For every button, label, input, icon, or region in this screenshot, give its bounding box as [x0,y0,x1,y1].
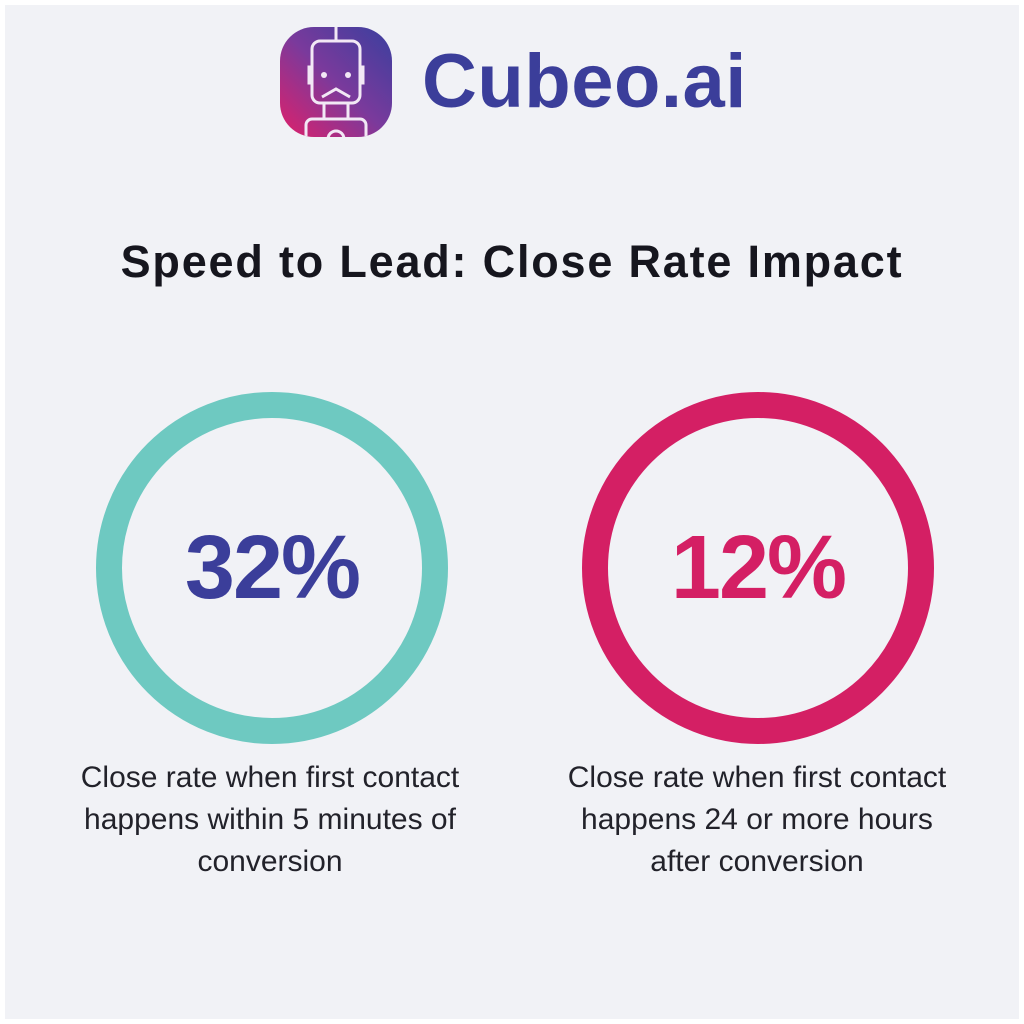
number: 32% [185,518,359,618]
number: 12% [671,518,845,618]
icon: robot [280,27,392,137]
caption: 12% [568,761,946,878]
ring: teal [96,392,448,744]
stat: 32% [96,392,448,744]
stat: 12% [582,392,934,744]
logo [280,27,747,137]
caption: 32%: conversion [197,845,343,878]
caption: 12%: Close rate when first contact [568,761,946,794]
ring: pink [582,392,934,744]
title: Speed to Lead: Close Rate Impact [121,236,903,287]
caption: 12%: happens 24 or more hours [581,803,933,836]
caption: 32% [81,761,459,878]
brand name: Cubeo.ai [422,39,747,124]
caption: 12%: after conversion [650,845,864,878]
caption: 32%: happens within 5 minutes of [84,803,456,836]
caption: 32%: Close rate when first contact [81,761,459,794]
